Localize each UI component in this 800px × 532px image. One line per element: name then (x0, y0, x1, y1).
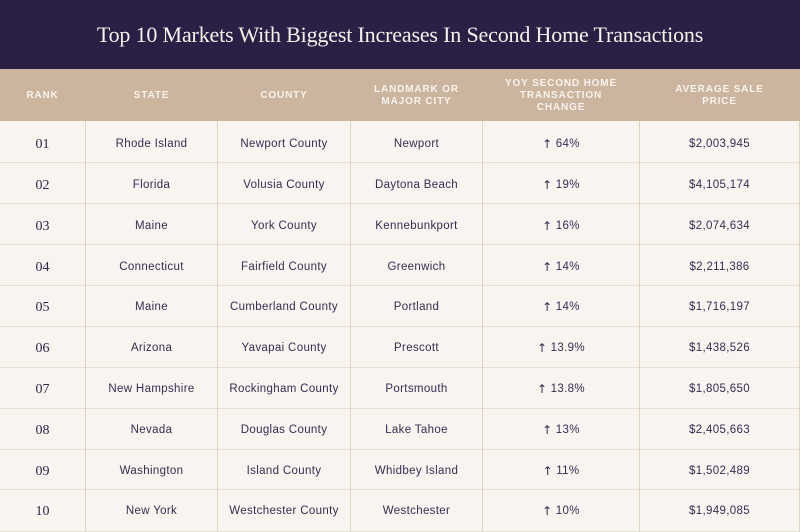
row 01: Rhode Island: 01 (36, 137, 50, 152)
row 09: Washington: Whidbey Island (375, 465, 458, 477)
row 03: Maine, York County: $2,074,634 (689, 220, 750, 232)
row 04: Connecticut: 14% (556, 261, 580, 273)
row 10: New York: ↑ (542, 504, 552, 518)
header: YoY second home transaction change: YOY SECOND HOME (505, 78, 617, 89)
row 02: Florida: 02 (36, 178, 50, 193)
row 03: Maine, York County: ↑ (542, 219, 552, 233)
row 04: Connecticut: $2,211,386 (689, 261, 750, 273)
row 10: New York: New York (126, 505, 177, 517)
row 07: New Hampshire: 07 (36, 382, 50, 397)
row 10: New York: $1,949,085 (689, 505, 750, 517)
row 04: Connecticut (36, 260, 750, 275)
row 09: Washington (36, 464, 750, 479)
row 01: Rhode Island: 64% (556, 138, 580, 150)
row 08: Nevada: Douglas County (241, 424, 327, 436)
row 06: Arizona: Arizona (131, 342, 172, 354)
row 02: Florida: $4,105,174 (689, 179, 750, 191)
row 03: Maine, York County: Kennebunkport (375, 220, 458, 232)
row 05: Maine, Cumberland County: $1,716,197 (689, 301, 750, 313)
row 07: New Hampshire: $1,805,650 (689, 383, 750, 395)
row 07: New Hampshire (36, 382, 750, 397)
header: county: COUNTY (260, 90, 308, 101)
row 10: New York: 10 (36, 504, 50, 519)
row 10: New York: 10% (556, 505, 580, 517)
header: YoY second home transaction change: CHANGE (537, 102, 585, 113)
header: landmark or major city: MAJOR CITY (381, 96, 452, 107)
row 07: New Hampshire: Portsmouth (385, 383, 448, 395)
row 03: Maine, York County: 16% (556, 220, 580, 232)
row 08: Nevada (36, 423, 750, 438)
title: Top 10 Markets With Biggest Increases In Second Home Transactions (97, 22, 703, 47)
row 05: Maine, Cumberland County: ↑ (542, 300, 552, 314)
row 02: Florida: 19% (556, 179, 580, 191)
row 06: Arizona: Yavapai County (241, 342, 327, 354)
row 03: Maine, York County: York County (251, 220, 317, 232)
row 07: New Hampshire: Rockingham County (229, 383, 339, 395)
row 10: New York (36, 504, 750, 519)
row 09: Washington: 11% (556, 465, 579, 477)
row 02: Florida: Daytona Beach (375, 179, 458, 191)
row 03: Maine, York County: 03 (36, 219, 50, 234)
row 01: Rhode Island: ↑ (542, 137, 552, 151)
header: landmark or major city (374, 84, 459, 107)
row 08: Nevada: Lake Tahoe (385, 424, 448, 436)
header: average sale price (675, 84, 764, 107)
row 05: Maine, Cumberland County: Portland (394, 301, 439, 313)
row 08: Nevada: ↑ (542, 423, 552, 437)
header: landmark or major city: LANDMARK OR (374, 84, 459, 95)
row 04: Connecticut: 04 (36, 260, 50, 275)
row 04: Connecticut: Fairfield County (241, 261, 327, 273)
header: state: STATE (134, 90, 169, 101)
row 09: Washington: $1,502,489 (689, 465, 750, 477)
row 05: Maine, Cumberland County: Maine (135, 301, 168, 313)
header: YoY second home transaction change (505, 78, 617, 113)
row 05: Maine, Cumberland County: 14% (556, 301, 580, 313)
row 04: Connecticut: Connecticut (119, 261, 184, 273)
title banner (0, 0, 800, 69)
row 09: Washington: Washington (120, 465, 183, 477)
row 06: Arizona: ↑ (537, 341, 547, 355)
row 06: Arizona: 13.9% (551, 342, 585, 354)
header: YoY second home transaction change: TRANSACTION (520, 90, 602, 101)
row 02: Florida: ↑ (542, 178, 552, 192)
row 05: Maine, Cumberland County: 05 (36, 300, 50, 315)
row 01: Rhode Island (36, 137, 750, 152)
row 10: New York: Westchester (383, 505, 450, 517)
header: average sale price: AVERAGE SALE (675, 84, 764, 95)
row 07: New Hampshire: New Hampshire (108, 383, 195, 395)
row 01: Rhode Island: Rhode Island (116, 138, 187, 150)
row 07: New Hampshire: ↑ (537, 382, 547, 396)
row 03: Maine, York County (36, 219, 750, 234)
header: average sale price: PRICE (702, 96, 737, 107)
row 10: New York: Westchester County (229, 505, 339, 517)
row 05: Maine, Cumberland County (36, 300, 750, 315)
row 08: Nevada: $2,405,663 (689, 424, 750, 436)
header: rank: RANK (26, 90, 59, 101)
row 06: Arizona: 06 (36, 341, 50, 356)
row 08: Nevada: 08 (36, 423, 50, 438)
row 07: New Hampshire: 13.8% (551, 383, 585, 395)
row 02: Florida: Florida (133, 179, 170, 191)
row 03: Maine, York County: Maine (135, 220, 168, 232)
row 09: Washington: ↑ (543, 464, 553, 478)
row 09: Washington: 09 (36, 464, 50, 479)
row 02: Florida (36, 178, 750, 193)
row 02: Florida: Volusia County (243, 179, 325, 191)
row 04: Connecticut: ↑ (542, 260, 552, 274)
row 04: Connecticut: Greenwich (387, 261, 446, 273)
row 01: Rhode Island: Newport (394, 138, 439, 150)
row 09: Washington: Island County (247, 465, 321, 477)
row 01: Rhode Island: $2,003,945 (689, 138, 750, 150)
row 08: Nevada: 13% (556, 424, 580, 436)
table header (0, 69, 800, 121)
row 05: Maine, Cumberland County: Cumberland County (230, 301, 338, 313)
row 06: Arizona (36, 341, 750, 356)
row 01: Rhode Island: Newport County (240, 138, 328, 150)
row 06: Arizona: $1,438,526 (689, 342, 750, 354)
row 08: Nevada: Nevada (131, 424, 172, 436)
row 06: Arizona: Prescott (394, 342, 439, 354)
